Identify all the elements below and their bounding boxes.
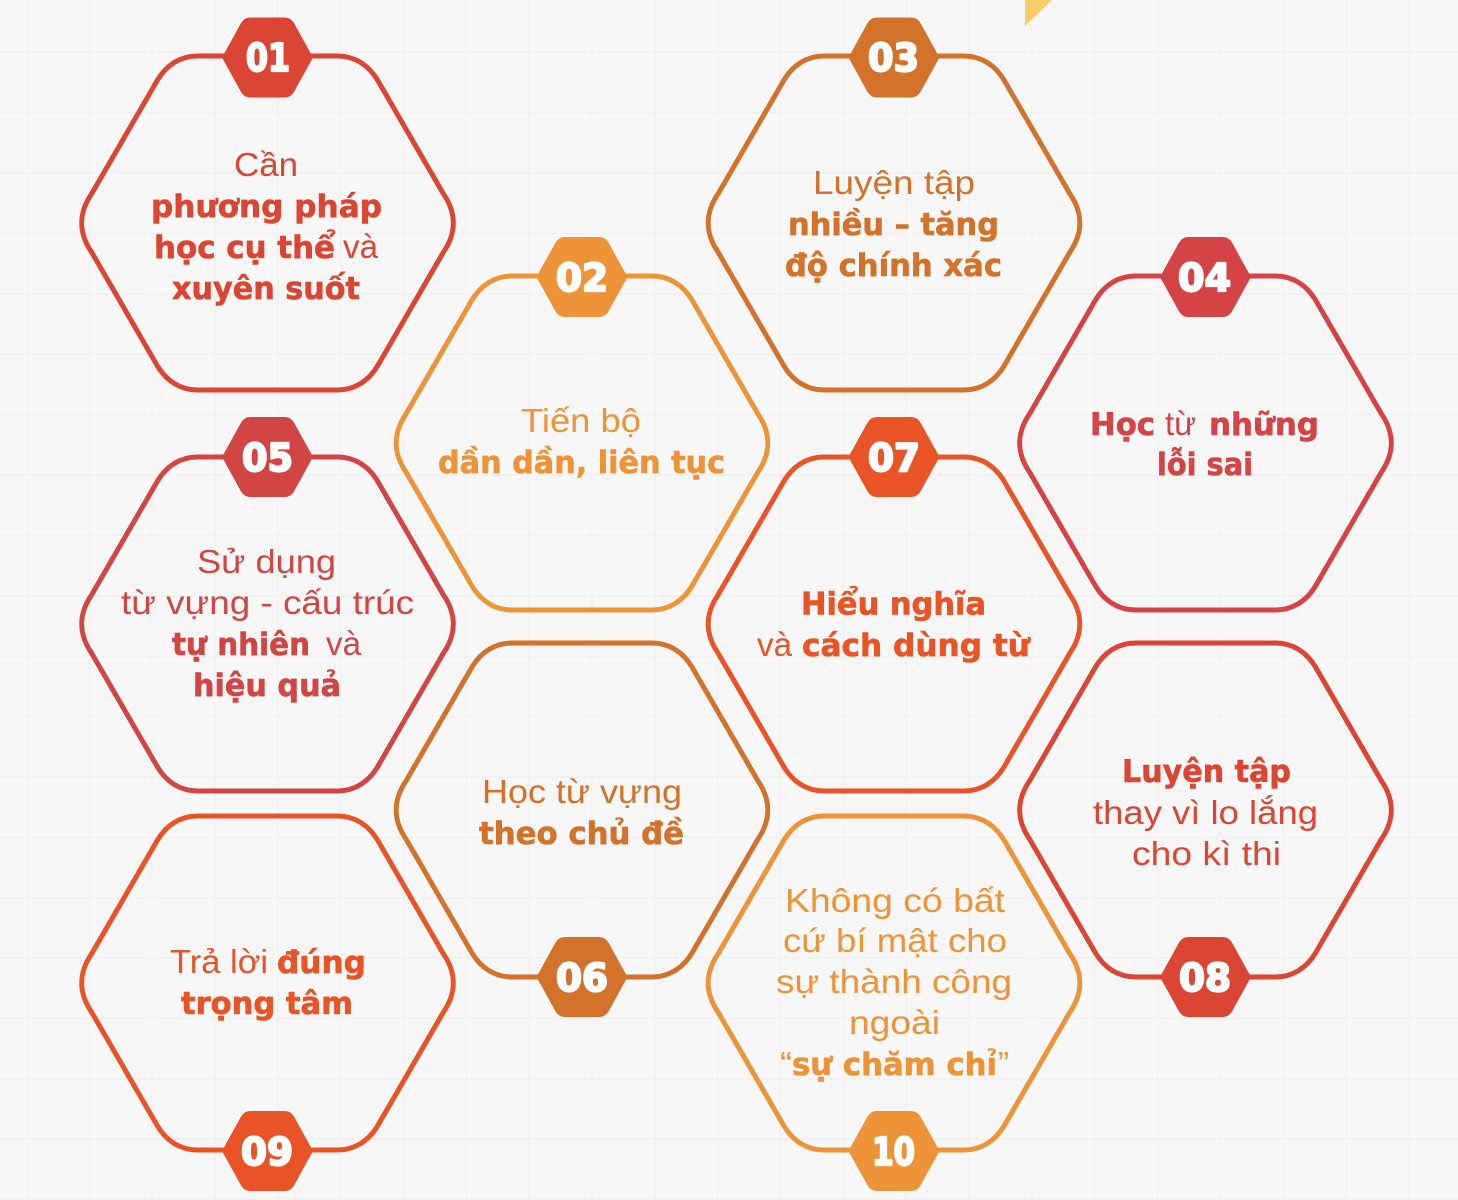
panel: hexagon 09: Trả lời <box>170 943 268 980</box>
panel: hexagon 07: Hiểu nghĩa <box>801 586 986 622</box>
panel: hexagon 04: những <box>1209 407 1319 443</box>
panel: hexagon 01: 01 <box>246 36 290 80</box>
panel: hexagon 10: cứ bí mật cho <box>783 922 1007 959</box>
panel: hexagon 09: trọng tâm <box>181 986 353 1022</box>
panel: hexagon 10: ” <box>998 1045 1009 1082</box>
panel: hexagon 04: từ <box>1165 405 1196 442</box>
panel: hexagon 02: dần dần, liên tục <box>438 445 725 481</box>
panel: hexagon 07: 07 <box>868 436 920 480</box>
panel: hexagon 04: lỗi sai <box>1157 447 1253 483</box>
panel: hexagon 06: Học từ vựng <box>482 773 682 810</box>
panel: hexagon 01: học cụ thể <box>154 230 336 266</box>
panel: hexagon 10: ngoài <box>849 1004 940 1041</box>
panel: hexagon 01: xuyên suốt <box>172 271 360 307</box>
panel: hexagon 05 <box>82 417 453 791</box>
decorative yellow triangle <box>1025 0 1052 26</box>
panel: hexagon 01: và <box>343 228 379 265</box>
panel: hexagon 08: cho kì thi <box>1132 835 1281 872</box>
panel: hexagon 03: nhiều – tăng <box>788 207 999 243</box>
panel: hexagon 05: tự nhiên <box>172 627 310 663</box>
panel: hexagon 05: và <box>326 625 362 662</box>
panel: hexagon 03: độ chính xác <box>785 248 1002 284</box>
panel: hexagon 07 <box>708 417 1080 791</box>
panel: hexagon 10: sự chăm chỉ <box>792 1047 997 1083</box>
panel: hexagon 05: Sử dụng <box>197 543 336 580</box>
panel: hexagon 10: Không có bất <box>785 882 1005 919</box>
panel: hexagon 06: 06 <box>556 956 608 1000</box>
panel: hexagon 07: cách dùng từ <box>802 628 1031 664</box>
panel: hexagon 10 <box>708 816 1080 1191</box>
panel: hexagon 09 <box>82 816 453 1191</box>
panel: hexagon 03 <box>708 18 1080 390</box>
panel: hexagon 04: Học <box>1090 407 1155 443</box>
panel: hexagon 04: 04 <box>1178 256 1231 300</box>
panel: hexagon 10: sự thành công <box>776 963 1012 1000</box>
panel: hexagon 10: “ <box>780 1045 792 1082</box>
panel: hexagon 05: từ vựng - cấu trúc <box>121 584 414 621</box>
panel: hexagon 03: Luyện tập <box>813 164 975 201</box>
panel: hexagon 08: Luyện tập <box>1122 754 1291 790</box>
panel: hexagon 01: phương pháp <box>151 189 382 225</box>
panel: hexagon 02 <box>396 237 768 610</box>
panel: hexagon 08: 08 <box>1179 956 1231 1000</box>
panel: hexagon 08 <box>1020 643 1391 1017</box>
panel: hexagon 09: 09 <box>241 1130 293 1174</box>
panel: hexagon 02: 02 <box>556 256 608 300</box>
panel: hexagon 04 <box>1020 237 1391 610</box>
panel: hexagon 06: theo chủ đề <box>479 816 684 852</box>
panel: hexagon 06 <box>396 643 768 1017</box>
panel: hexagon 01: Cần <box>234 146 298 183</box>
panel: hexagon 05: 05 <box>242 436 293 480</box>
panel: hexagon 05: hiệu quả <box>193 668 341 704</box>
panel: hexagon 08: thay vì lo lắng <box>1093 794 1318 831</box>
panel: hexagon 10: 10 <box>872 1130 915 1174</box>
panel: hexagon 03: 03 <box>868 36 919 80</box>
panel: hexagon 01 <box>82 18 453 390</box>
panel: hexagon 09: đúng <box>277 945 366 981</box>
panel: hexagon 07: và <box>757 626 793 663</box>
panel: hexagon 02: Tiến bộ <box>521 402 641 439</box>
